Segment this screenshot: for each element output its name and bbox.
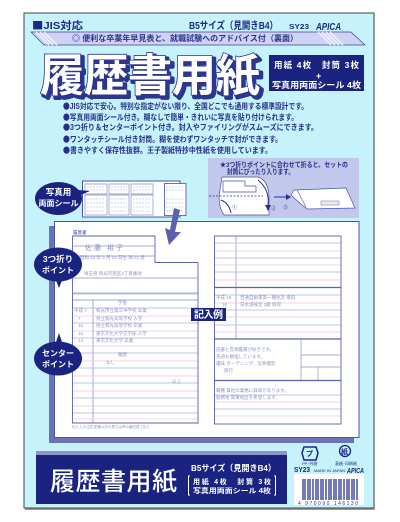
product code and origin: MADE IN JAPAN — [314, 468, 345, 473]
document page shadow — [49, 226, 354, 443]
form: right page: 旅行 — [224, 367, 233, 374]
arrow: seal to photo area — [165, 208, 181, 245]
barcode: 4 970090 146130 — [298, 501, 358, 507]
brand logo: APICA — [315, 22, 341, 33]
callout: photo seal — [35, 182, 90, 215]
panel: folding guide: ③ — [283, 204, 288, 211]
contents box: + — [316, 71, 321, 81]
product code and origin — [294, 467, 364, 475]
form: left page: 7 — [78, 316, 81, 321]
form: left page: 10 — [78, 323, 84, 328]
feature bullet list: ●JIS対応で安心。特別な指定がない限り、全国どこでも通用する標準設計です。 — [63, 101, 308, 112]
form: left page: 県立和光高等学校 入学 — [96, 315, 143, 322]
form: left page: 学歴 — [118, 299, 127, 306]
callout: three-fold point: ポイント — [42, 266, 74, 275]
panel: folding guide: ★3つ折りポイントに合わせて折ると、セットの — [220, 160, 348, 169]
contents box: 用紙 4枚 封筒 3枚 — [274, 60, 359, 70]
form: left page — [72, 229, 198, 429]
callout: three-fold point: 3つ折り — [43, 254, 73, 264]
form: left page: 埼玉県 和光市南区2丁目番地 — [84, 270, 142, 277]
form: right page: 職種 貴社の業務に興味があります。 — [216, 387, 289, 394]
icon: plastic recycling mark — [302, 447, 318, 466]
feature bullet list: ●写真用両面シール付き。糊なしで簡単・きれいに写真を貼り付けられます。 — [63, 112, 298, 123]
form: right page: 日本語検定 2級 取得 — [240, 301, 282, 308]
document page — [54, 222, 359, 438]
callout: photo seal: 両面シール — [38, 199, 78, 208]
panel: folding guide — [208, 158, 359, 218]
contents box: 写真用両面シール 4枚 — [272, 80, 362, 90]
form: right page: 勤務地 関東地区を希望します。 — [216, 394, 280, 401]
form: left page: 10 — [78, 331, 84, 336]
form: left page: 平成 7 — [74, 307, 87, 314]
feature bullet list: ●ワンタッチシール付き封筒。糊を使わずワンタッチで封ができます。 — [63, 134, 282, 145]
form: left page: なし — [106, 359, 115, 365]
callout: center point — [34, 333, 82, 376]
icon: plastic recycling mark: プ — [306, 450, 313, 458]
form: left page: 以上 — [172, 378, 181, 384]
form: left page: 東京文化大学 卒業 — [96, 337, 134, 344]
icon: paper recycling mark: 紙 — [341, 447, 348, 456]
form: right page — [214, 236, 341, 424]
panel: folding guide: ① — [232, 204, 237, 211]
form: left page: 14 — [78, 338, 84, 343]
feature bullet list: ●書きやすく保存性抜群。王子製紙特抄中性紙を使用しています。 — [63, 145, 272, 156]
feature bullet list — [63, 101, 318, 156]
label: sample entry: 記入例 — [194, 308, 223, 321]
icon: paper recycling mark — [335, 446, 357, 466]
footer band: 用紙 4枚 封筒 3枚 — [193, 477, 271, 486]
size label: B5サイズ（見開きB4） — [189, 19, 278, 32]
ribbon: advice note — [31, 32, 365, 45]
callout: photo seal: 写真用 — [46, 187, 71, 197]
barcode — [294, 474, 364, 507]
main title: 履歴書用紙 — [42, 54, 262, 104]
panel: photo seal sheet — [82, 181, 186, 217]
feature bullet list: ●3つ折り＆センターポイント付き。封入やファイリングがスムーズにできます。 — [63, 122, 318, 133]
footer band: 履歴書用紙 — [50, 468, 177, 496]
callout: three-fold point — [34, 248, 82, 288]
form: right page: 読書と音楽鑑賞が好きです。 — [216, 346, 274, 353]
heading: JIS compliance: ■JIS対応 — [32, 18, 84, 33]
form: right page: 趣味 ガーデニング、写真撮影 — [216, 360, 276, 367]
ribbon: advice note: ◎ 便利な卒業年早見表と、就職試験へのアドバイス付（裏面） — [72, 33, 298, 43]
form: left page: 東京文化大学文学部 入学 — [96, 330, 147, 337]
product code: SY23 — [289, 22, 309, 31]
icon: plastic recycling mark: PP･外袋 — [302, 460, 317, 466]
callout: center point: センター — [42, 348, 74, 358]
panel: folding guide: 封筒にぴったり入ります。 — [227, 167, 294, 176]
main title: 履歴書用紙 — [40, 52, 260, 101]
product code and origin: APICA — [346, 468, 364, 475]
form: left page: 職歴 — [118, 351, 127, 358]
form: left page: 履歴書 — [73, 229, 87, 236]
form: right page: 平成 15 — [216, 294, 232, 301]
form: left page: 昭和 52 年 5 月 22 日生 満 22 歳 — [80, 254, 145, 261]
footer band: 写真用両面シール 4枚 — [193, 486, 271, 495]
form: left page: 県立和光高等学校 卒業 — [96, 322, 143, 329]
form: left page: 記入上の注意 鉛筆以外の黒又は青の筆記具で記入 — [72, 424, 150, 429]
contents box — [269, 55, 364, 91]
form: right page: 英語も勉強しています。 — [216, 353, 265, 360]
handwritten name: 佐藤 裕子 — [85, 243, 123, 252]
form: right page: 普通自動車第一種免許 取得 — [240, 294, 296, 301]
form: right page: 16 — [222, 302, 228, 307]
product code and origin: SY23 — [294, 467, 310, 474]
icon: paper recycling mark: 表紙･印刷紙 — [335, 460, 357, 466]
footer band — [36, 451, 287, 504]
form: left page: 和光市立第三中学校 卒業 — [96, 307, 147, 314]
callout: center point: ポイント — [42, 360, 74, 369]
footer band: B5サイズ（見開きB4） — [191, 463, 276, 473]
panel: folding guide: ② — [271, 205, 276, 212]
